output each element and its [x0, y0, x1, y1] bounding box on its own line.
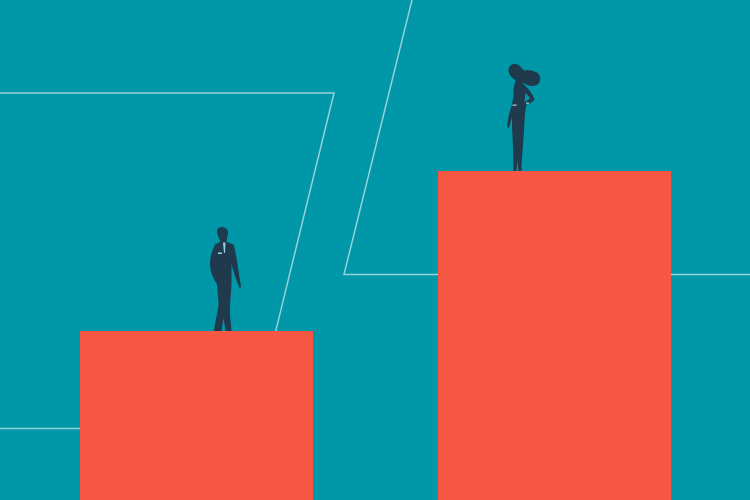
bar: short left platform: [80, 331, 313, 500]
woman head and hair: [508, 64, 540, 86]
woman body: [507, 79, 534, 171]
man hand: [238, 283, 241, 288]
bar: tall right platform: [438, 171, 671, 500]
outline shape: left parallelogram: [0, 93, 334, 428]
outline shape: right parallelogram: [344, 0, 750, 274]
man head: [217, 227, 228, 243]
man pocket square: [218, 252, 222, 254]
woman bracelet: [512, 104, 516, 106]
man shirt and tie: [223, 242, 226, 253]
woman watch: [526, 102, 529, 104]
figure: woman with hand on hip: [507, 64, 540, 171]
man body: [210, 242, 240, 331]
figure: man in suit: [210, 227, 241, 331]
